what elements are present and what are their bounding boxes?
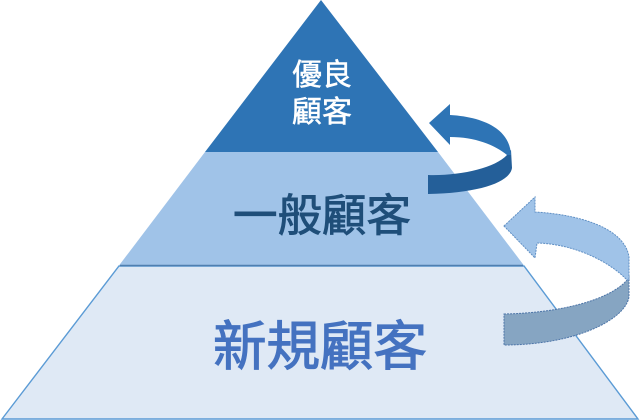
label: premium customers: 優良 [292,59,352,92]
tier: premium customers [205,0,438,152]
arrow: general to premium [428,104,512,194]
tier: general customers [119,152,524,266]
arrow: new to general [504,197,629,345]
label: new customers: 新規顧客 [213,318,427,377]
label: general customers: 一般顧客 [233,192,411,241]
label: premium customers: 顧客 [292,96,352,129]
